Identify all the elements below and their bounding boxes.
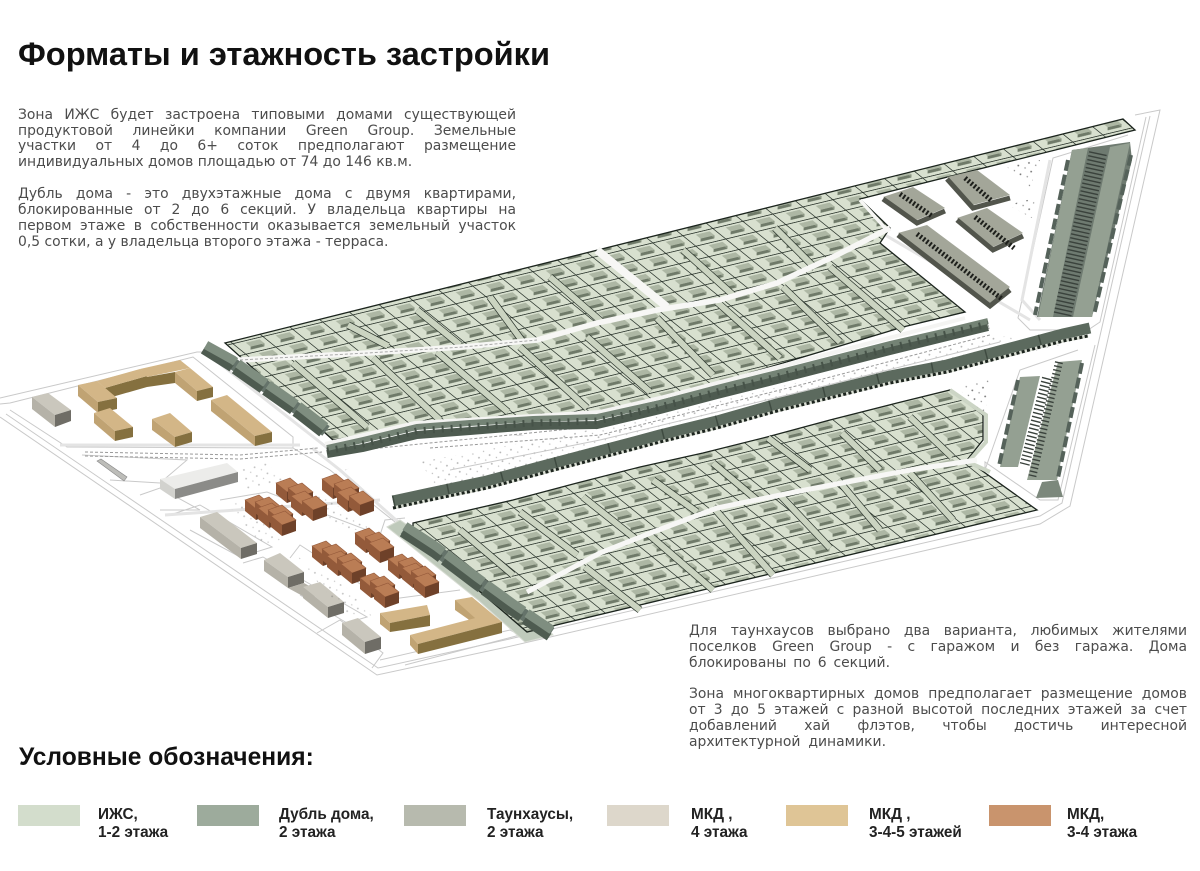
text block: townhouses and apartment buildings description — [689, 623, 1187, 750]
legend label: townhouses: 2 этажа — [487, 824, 544, 841]
text block: townhouses and apartment buildings description: блокированы по 6 секций. — [689, 655, 890, 671]
trees and paths in park strip — [340, 328, 1060, 492]
text block: townhouses and apartment buildings description: архитектурной динамики. — [689, 734, 886, 750]
legend label: townhouses: Таунхаусы, — [487, 806, 573, 823]
duplex row one — [327, 321, 988, 454]
road network and site outline — [0, 110, 1160, 675]
road along duplex row one — [325, 318, 965, 444]
tree groups around north-east blocks — [958, 160, 1040, 415]
main white roads through the plots — [240, 200, 977, 592]
four-floor apartment blocks — [32, 393, 381, 654]
legend label: duplex: 2 этажа — [279, 824, 336, 841]
open space with trees between duplex rows — [345, 335, 1075, 498]
parked cars and trees near brick blocks — [228, 462, 375, 620]
legend swatch: apartment 4 floors — [607, 805, 669, 826]
text block: IZhS and duplex description — [18, 107, 516, 250]
duplex rows along the west edges — [203, 345, 552, 637]
duplex row two — [393, 328, 1090, 508]
title: Форматы и этажность застройки — [18, 35, 550, 72]
mid-rise 3-4-5 floors: south blocks — [380, 597, 502, 654]
legend — [18, 805, 1138, 841]
text block: IZhS and duplex description: блокированные от 2 до 6 секций. У владельца квартиры на — [18, 202, 516, 218]
pale panel at east end of lower zone — [950, 390, 990, 472]
text block: IZhS and duplex description: Дубль дома - это двухэтажные дома с двумя квартирами, — [18, 186, 516, 202]
text block: IZhS and duplex description: индивидуальных домов площадью от 74 до 146 кв.м. — [18, 154, 412, 170]
brick cluster four — [355, 528, 394, 563]
text block: IZhS and duplex description: Зона ИЖС будет застроена типовыми домами существующей — [18, 107, 516, 123]
legend label: townhouses — [487, 806, 573, 841]
legend label: apartment 4 floors — [691, 806, 748, 841]
zone: IZhS plots, upper area — [225, 119, 1135, 440]
mid-rise 3-4-5 floors: northwest courtyard blocks — [78, 360, 272, 447]
legend label: apartment 3-4 floors: МКД, — [1067, 806, 1104, 823]
zone: IZhS plots, lower area — [413, 390, 1037, 632]
legend label: IZhS — [98, 806, 168, 841]
legend label: apartment 3-4-5 floors: 3-4-5 этажей — [869, 824, 962, 841]
legend swatch: apartment 3-4 floors — [989, 805, 1051, 826]
brick cluster three — [322, 474, 374, 516]
legend label: apartment 3-4-5 floors: МКД , — [869, 806, 910, 823]
brick mid-rise 3-4 floors: cluster one — [245, 495, 296, 536]
brick cluster seven — [360, 573, 399, 608]
text block: townhouses and apartment buildings description: Зона многоквартирных домов предполагает размещение домов — [689, 686, 1187, 702]
legend swatch: duplex — [197, 805, 259, 826]
legend swatch: apartment 3-4-5 floors — [786, 805, 848, 826]
townhouse cluster: south-east block — [999, 360, 1082, 498]
legend label: duplex — [279, 806, 374, 841]
legend label: IZhS: 1-2 этажа — [98, 824, 168, 841]
lanes inside the plot zones — [293, 228, 953, 610]
legend label: IZhS: ИЖС, — [98, 806, 138, 823]
legend swatch: IZhS — [18, 805, 80, 826]
text block: townhouses and apartment buildings description: добавлений хай флэтов, чтобы достичь интересной — [689, 718, 1187, 734]
legend label: duplex: Дубль дома, — [279, 806, 374, 823]
legend label: apartment 3-4 floors: 3-4 этажа — [1067, 824, 1137, 841]
legend label: apartment 4 floors: 4 этажа — [691, 824, 748, 841]
text block: townhouses and apartment buildings description: поселков Green Group - с гаражом и без гаража. Дома — [689, 639, 1187, 655]
brick cluster two — [276, 478, 327, 521]
text block: IZhS and duplex description: первом этаже в собственности оказывается земельный участок — [18, 218, 516, 234]
legend label: apartment 3-4 floors — [1067, 806, 1138, 841]
legend heading: Условные обозначения: — [19, 744, 314, 771]
text block: IZhS and duplex description: продуктовой линейки компании Green Group. Земельные — [18, 123, 516, 139]
legend label: apartment 4 floors: МКД , — [691, 806, 732, 823]
text block: IZhS and duplex description: 0,5 сотки, а у владельца второго этажа - терраса. — [18, 234, 388, 250]
text block: townhouses and apartment buildings description: от 3 до 5 этажей с разной высотой последних этажей за счет — [689, 702, 1187, 718]
text block: townhouses and apartment buildings description: Для таунхаусов выбрано два варианта, любимых жителями — [689, 623, 1187, 639]
brick cluster six — [388, 554, 439, 598]
dubl house green panel, lower-left — [387, 520, 553, 642]
townhouse clusters: north-east blocks — [883, 170, 1023, 306]
brick cluster five — [312, 541, 366, 584]
white public building — [97, 459, 238, 499]
legend swatch: townhouses — [404, 805, 466, 826]
text block: IZhS and duplex description: участки от 4 до 6+ соток предполагают размещение — [18, 138, 516, 154]
townhouse cluster: large east block — [1035, 142, 1132, 317]
legend label: apartment 3-4-5 floors — [869, 806, 962, 841]
